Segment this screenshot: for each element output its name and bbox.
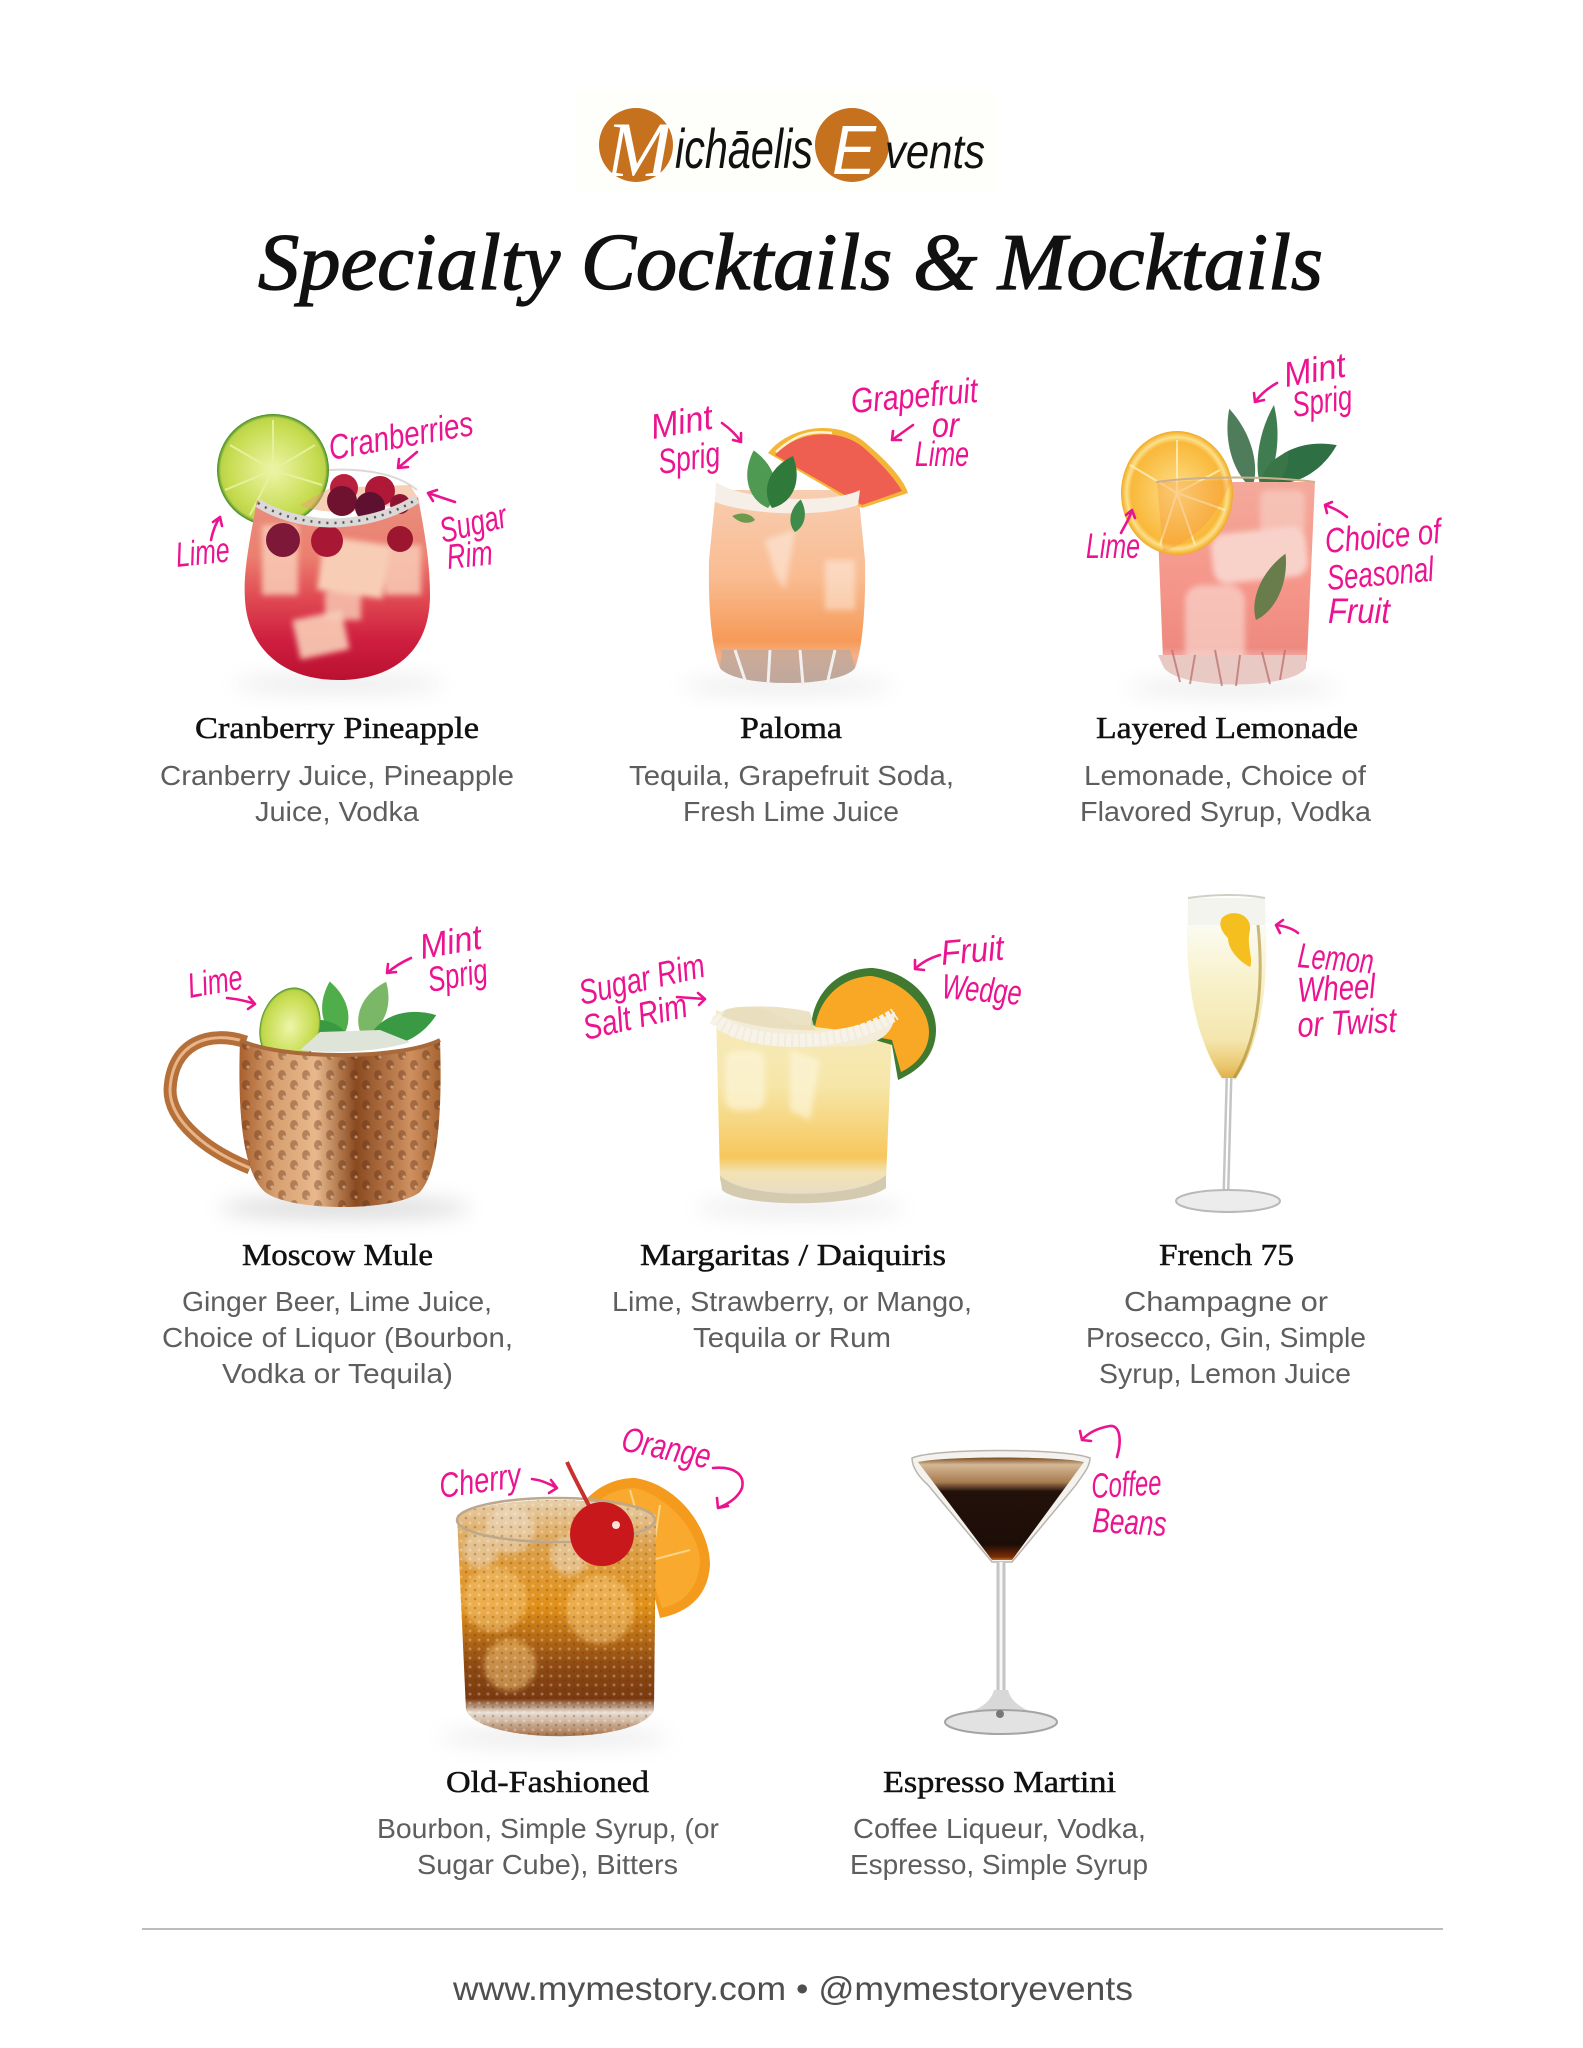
handwritten label: Lemon: Lemon — [1296, 936, 1375, 982]
handwritten label: Sprig: Sprig — [656, 435, 723, 482]
handwritten label: Salt Rim: Salt Rim — [579, 986, 691, 1048]
arrow: Choice of Seasonal Fruit — [1325, 502, 1347, 517]
description: Sugar Cube), Bitters — [417, 1849, 678, 1880]
drink illustration: margarita glass — [695, 968, 936, 1218]
handwritten label: Rim: Rim — [445, 533, 495, 577]
arrow: Lime — [227, 997, 255, 1009]
arrow: Lemon Wheel or Twist — [1276, 920, 1298, 933]
description — [162, 1286, 513, 1389]
description: Syrup, Lemon Juice — [1099, 1358, 1351, 1389]
arrow: Cranberries — [398, 452, 417, 468]
description: Tequila, Grapefruit Soda, — [629, 760, 954, 791]
arrow: Lime — [211, 517, 222, 540]
arrow: Mint Sprig — [722, 423, 741, 442]
handwritten label: Fruit: Fruit — [939, 929, 1007, 973]
handwritten label: Mint: Mint — [1281, 345, 1350, 395]
description — [850, 1813, 1148, 1880]
logo circle M — [599, 108, 673, 182]
description: Flavored Syrup, Vodka — [1080, 796, 1371, 827]
handwritten label: Grapefruit: Grapefruit — [849, 371, 980, 421]
handwritten label: Beans: Beans — [1092, 1501, 1168, 1544]
panel: Layered Lemonade — [1080, 345, 1445, 827]
panel: Paloma — [629, 371, 980, 827]
logo letter E: E — [832, 111, 877, 189]
logo — [575, 92, 995, 193]
description: Vodka or Tequila) — [222, 1358, 453, 1389]
drink illustration: paloma glass — [682, 428, 908, 694]
drink illustration: lemonade glass — [1121, 404, 1343, 696]
description — [629, 760, 954, 827]
arrow: Mint Sprig — [1254, 383, 1277, 402]
description — [612, 1286, 972, 1353]
description: Ginger Beer, Lime Juice, — [182, 1286, 492, 1317]
arrow: Mint Sprig — [387, 958, 411, 973]
handwritten label: Sprig: Sprig — [1290, 378, 1355, 425]
name: Old-Fashioned — [446, 1764, 650, 1799]
drink illustration: copper mug — [170, 977, 470, 1218]
handwritten label: Seasonal: Seasonal — [1325, 550, 1436, 598]
name: Cranberry Pineapple — [195, 710, 479, 745]
logo word ichaelis: ichāelis — [675, 117, 813, 180]
description: Bourbon, Simple Syrup, (or — [377, 1813, 719, 1844]
description: Champagne or — [1124, 1286, 1328, 1317]
handwritten label: or: or — [932, 406, 960, 445]
logo circle E — [815, 108, 889, 182]
arrow: Cherry — [532, 1479, 557, 1493]
name: Margaritas / Daiquiris — [640, 1237, 946, 1272]
description — [1080, 760, 1371, 827]
handwritten label: Cranberries: Cranberries — [326, 404, 476, 468]
description: Lime, Strawberry, or Mango, — [612, 1286, 972, 1317]
description: Fresh Lime Juice — [683, 796, 899, 827]
name: Layered Lemonade — [1096, 710, 1358, 745]
handwritten label: Wedge: Wedge — [940, 967, 1023, 1013]
description: Tequila or Rum — [693, 1322, 891, 1353]
description: Lemonade, Choice of — [1084, 760, 1366, 791]
arrow: Orange — [713, 1468, 743, 1508]
description — [160, 760, 514, 827]
handwritten label: Choice of: Choice of — [1323, 512, 1445, 561]
handwritten label: Lime: Lime — [915, 435, 969, 474]
panel: Espresso Martini — [850, 1426, 1168, 1880]
handwritten label: Cherry: Cherry — [437, 1456, 525, 1506]
description: Coffee Liqueur, Vodka, — [853, 1813, 1146, 1844]
panel: Cranberry Pineapple — [160, 404, 514, 827]
description — [1086, 1286, 1366, 1389]
handwritten label: Sugar: Sugar — [436, 496, 512, 551]
handwritten label: Mint: Mint — [648, 397, 717, 447]
handwritten label: Wheel: Wheel — [1296, 967, 1377, 1010]
handwritten label: Lime: Lime — [174, 531, 232, 575]
drink illustration: champagne flute — [1176, 895, 1280, 1212]
logo letter M: M — [605, 106, 676, 193]
name: Paloma — [740, 710, 842, 745]
name: French 75 — [1159, 1237, 1294, 1272]
panel: Moscow Mule — [162, 917, 513, 1389]
description: Choice of Liquor (Bourbon, — [162, 1322, 513, 1353]
handwritten label: Fruit: Fruit — [1328, 592, 1391, 631]
description — [377, 1813, 719, 1880]
drink illustration: rocks glass — [440, 1462, 710, 1746]
name: Moscow Mule — [242, 1237, 433, 1272]
drink illustration: cranberry glass — [217, 414, 443, 693]
drink illustration: martini glass — [912, 1450, 1090, 1734]
arrow: Fruit Wedge — [915, 955, 940, 970]
handwritten label: Mint: Mint — [417, 917, 486, 967]
arrow: Lime — [1121, 510, 1135, 533]
title: Specialty Cocktails & Mocktails — [258, 219, 1323, 307]
handwritten label: Sugar Rim: Sugar Rim — [575, 946, 709, 1013]
description: Cranberry Juice, Pineapple — [160, 760, 514, 791]
description: Espresso, Simple Syrup — [850, 1849, 1148, 1880]
description: Juice, Vodka — [255, 796, 419, 827]
description: Prosecco, Gin, Simple — [1086, 1322, 1366, 1353]
logo word vents: vents — [885, 126, 985, 179]
panel: Margaritas / Daiquiris — [575, 929, 1023, 1353]
handwritten label: Lime: Lime — [1086, 527, 1140, 566]
arrow: Sugar Salt Rim — [677, 993, 705, 1005]
handwritten label: Lime: Lime — [185, 958, 246, 1006]
arrow: Sugar Rim — [428, 490, 455, 502]
handwritten label: Orange: Orange — [618, 1420, 714, 1477]
name: Espresso Martini — [883, 1764, 1116, 1799]
arrow: Grapefruit or Lime — [892, 425, 913, 440]
arrow: Coffee Beans — [1080, 1426, 1120, 1457]
footer: www.mymestory.com • @mymestoryevents — [452, 1970, 1133, 2007]
panel: Old-Fashioned — [377, 1420, 743, 1880]
handwritten label: or Twist: or Twist — [1296, 1001, 1398, 1045]
handwritten label: Coffee: Coffee — [1090, 1463, 1162, 1506]
panel: French 75 — [1086, 895, 1398, 1389]
handwritten label: Sprig: Sprig — [425, 951, 491, 1000]
